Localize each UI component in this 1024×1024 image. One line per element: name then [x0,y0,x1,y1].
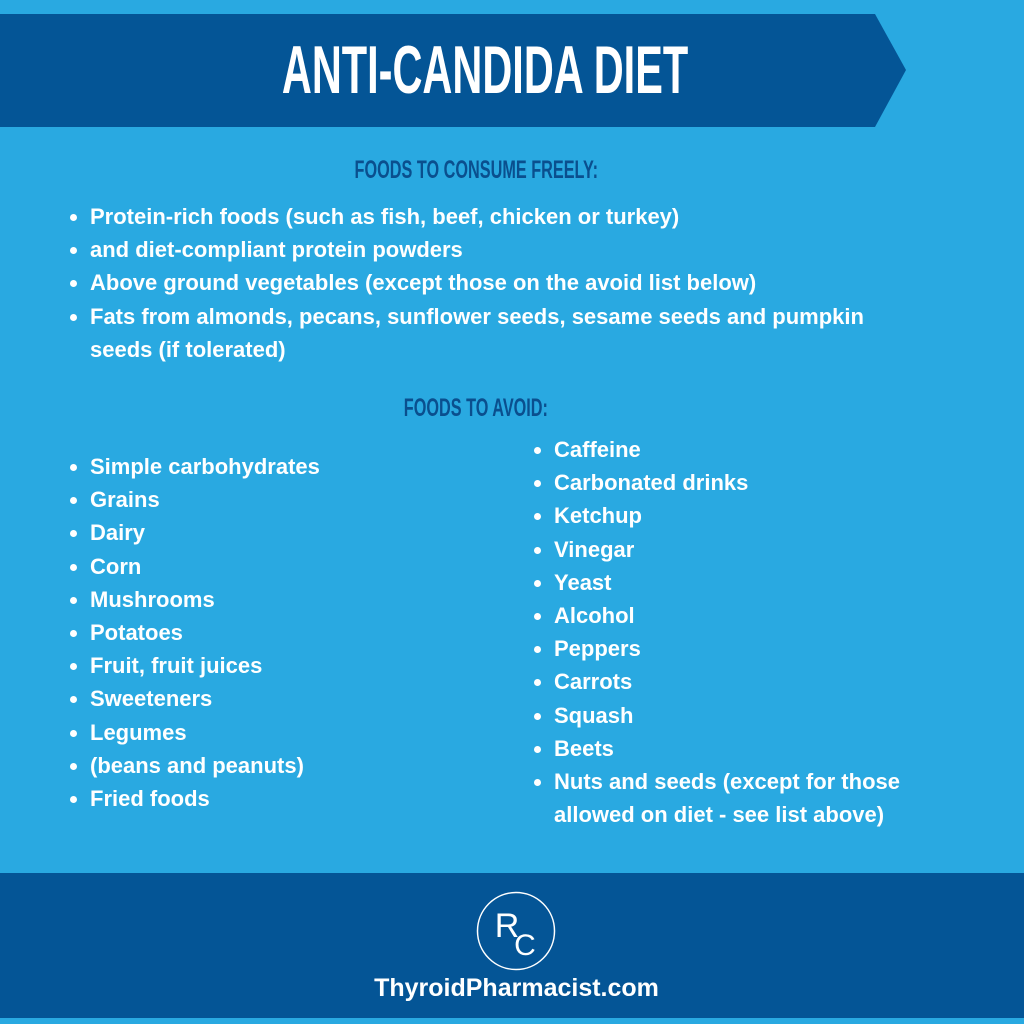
list: avoid left: (beans and peanuts) [90,753,304,778]
list: consume freely: Protein-rich foods (such as fish, beef, chicken or turkey) [90,204,679,229]
title banner [0,14,906,127]
footer [0,873,1024,1018]
list: consume freely: Fats from almonds, pecans, sunflower seeds, sesame seeds and pumpkin seeds (if tolerated) [90,304,864,362]
list: avoid left: Fruit, fruit juices [90,653,262,678]
icon: RC logo [476,892,556,970]
list: avoid left: Potatoes [90,620,183,645]
list: avoid right: Yeast [554,570,612,595]
list: avoid left: Grains [90,487,160,512]
list: avoid right: Nuts and seeds (except for those allowed on diet - see list above) [554,769,900,827]
heading: avoid: FOODS TO AVOID: [404,394,548,422]
list: consume freely [70,204,864,362]
list: avoid left [70,454,320,811]
heading: consume freely: FOODS TO CONSUME FREELY: [354,156,598,184]
list: consume freely: Above ground vegetables (except those on the avoid list below) [90,270,756,295]
list: avoid left: Fried foods [90,786,210,811]
list: avoid right: Alcohol [554,603,635,628]
list: avoid left: Simple carbohydrates [90,454,320,479]
title: ANTI-CANDIDA DIET [282,32,688,108]
list: avoid right: Caffeine [554,437,641,462]
list: avoid right: Beets [554,736,614,761]
list: avoid left: Sweeteners [90,686,212,711]
list: avoid right [534,437,900,827]
list: avoid left: Dairy [90,520,145,545]
list: avoid left: Legumes [90,720,187,745]
list: avoid right: Carrots [554,669,632,694]
list: avoid right: Peppers [554,636,641,661]
list: avoid right: Ketchup [554,503,642,528]
website text: ThyroidPharmacist.com [374,974,659,1002]
list: avoid left: Mushrooms [90,587,215,612]
list: avoid right: Vinegar [554,537,634,562]
list: consume freely: and diet-compliant protein powders [90,237,463,262]
list: avoid right: Carbonated drinks [554,470,748,495]
icon: RC logo: C [514,929,536,962]
list: avoid right: Squash [554,703,633,728]
list: avoid left: Corn [90,554,141,579]
icon: RC logo: R [495,907,519,945]
